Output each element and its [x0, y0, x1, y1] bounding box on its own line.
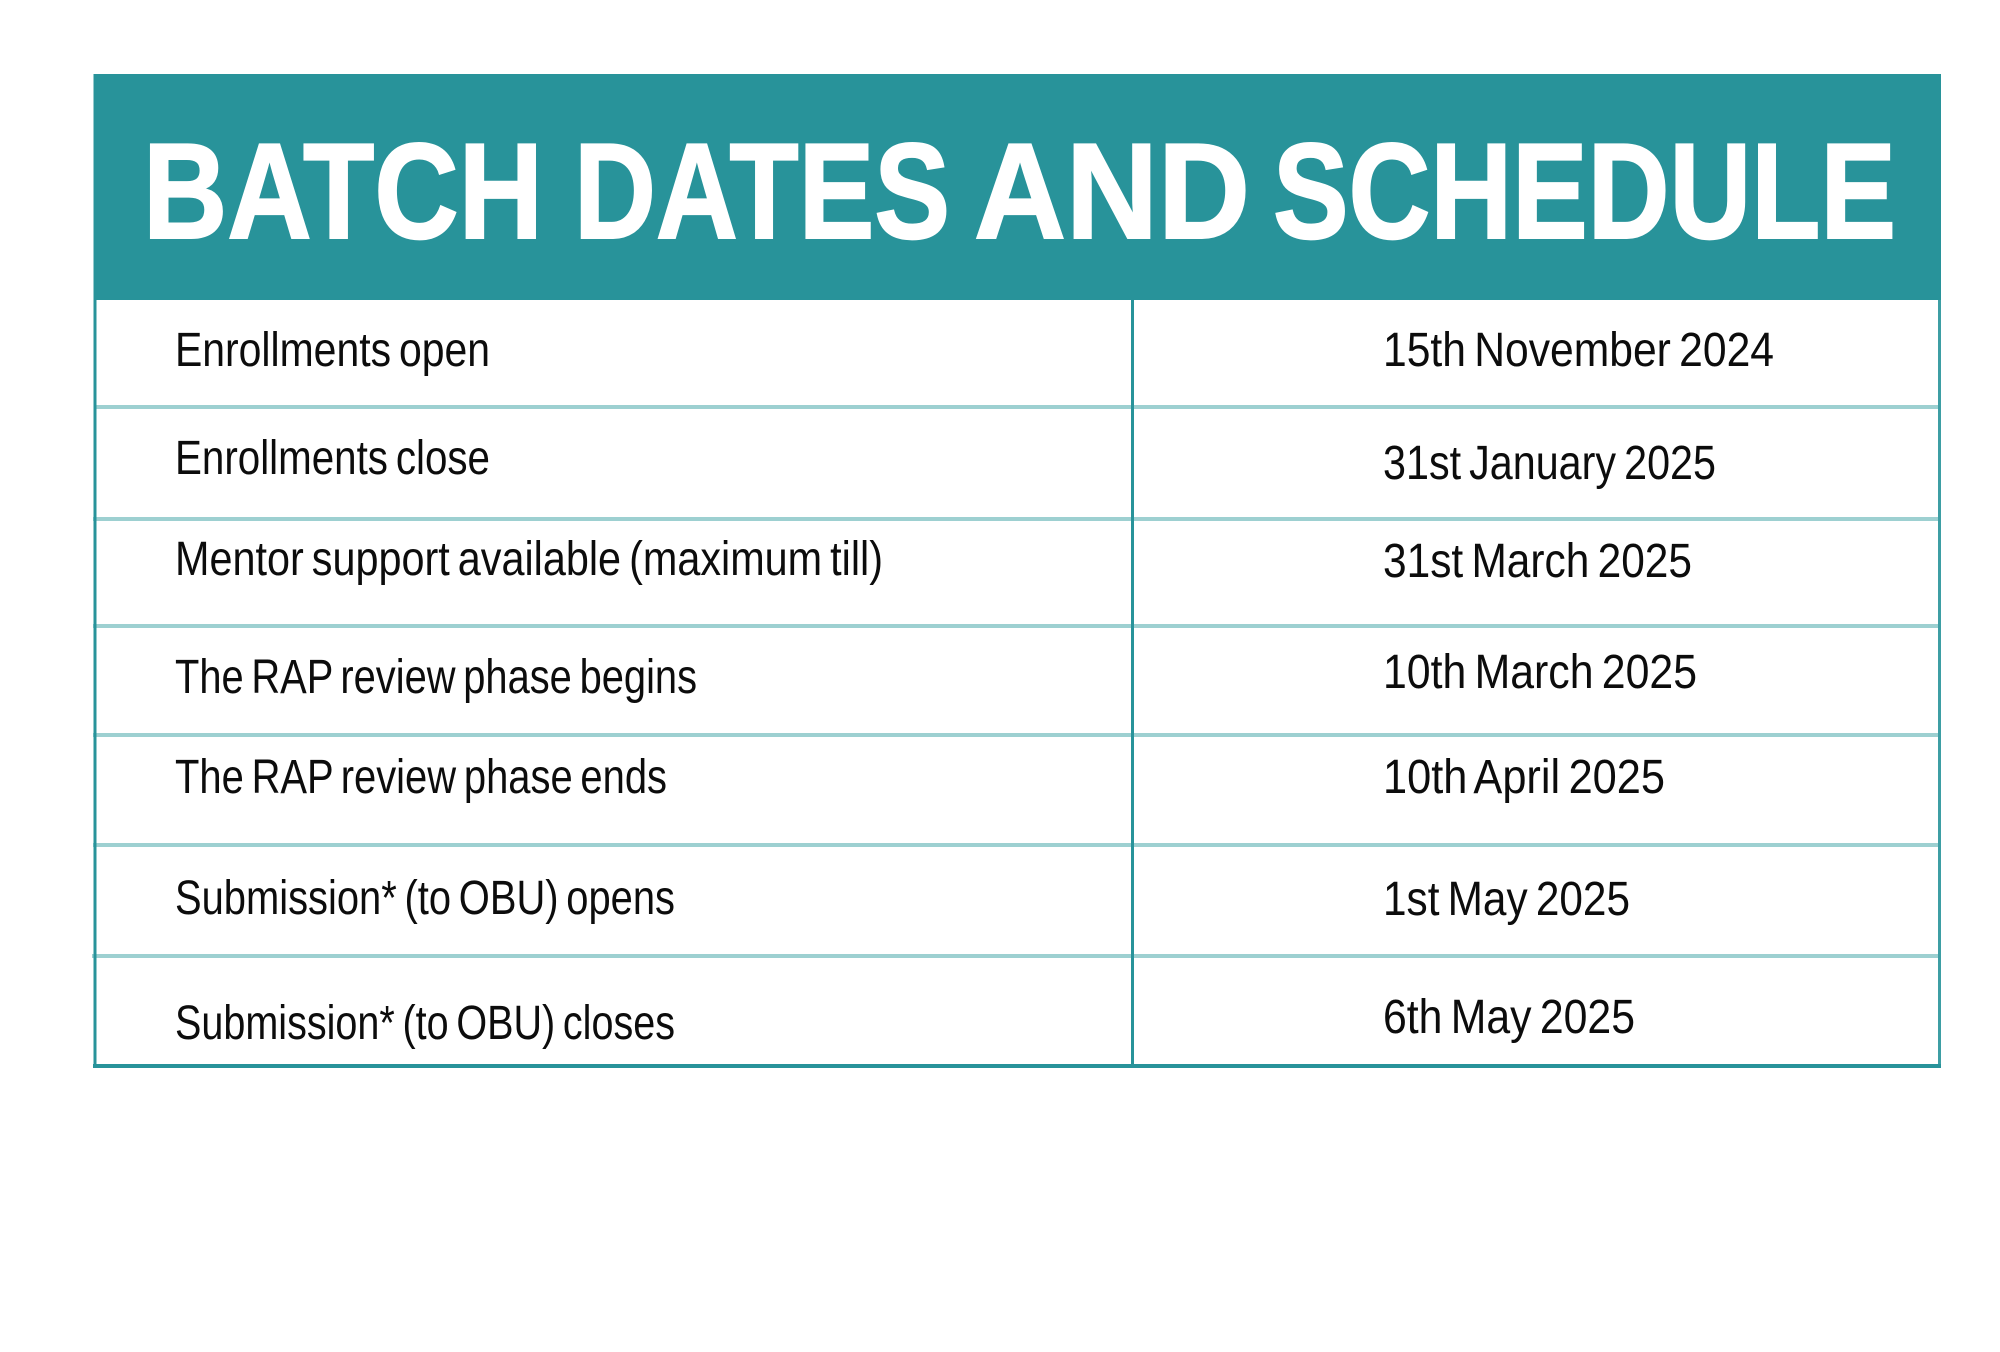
- title: DATES: [574, 115, 950, 267]
- row: enrollments open: 15th November 2024: [1383, 324, 1774, 377]
- row: mentor support: [175, 533, 1692, 588]
- row: submission opens: Submission* (to OBU) opens: [175, 872, 675, 925]
- row: submission closes: 6th May 2025: [1383, 991, 1635, 1044]
- row: enrollments open: [175, 324, 1774, 377]
- title: SCHEDULE: [1273, 115, 1896, 267]
- row: RAP review begins: [175, 646, 1697, 704]
- title: [143, 115, 1896, 267]
- header banner: [94, 74, 1941, 300]
- row: mentor support: Mentor support available (maximum till): [175, 533, 883, 586]
- title: AND: [974, 115, 1250, 267]
- row: RAP review ends: The RAP review phase ends: [175, 751, 667, 804]
- row: submission opens: [175, 872, 1630, 926]
- row: RAP review ends: 10th April 2025: [1383, 751, 1665, 804]
- row: enrollments close: 31st January 2025: [1383, 437, 1716, 490]
- row: mentor support: 31st March 2025: [1383, 535, 1692, 588]
- row: enrollments open: Enrollments open: [175, 324, 490, 377]
- row: RAP review ends: [175, 751, 1665, 804]
- row: RAP review begins: 10th March 2025: [1383, 646, 1697, 699]
- row: submission closes: Submission* (to OBU) closes: [175, 997, 675, 1050]
- table frame and grid: [92, 300, 1941, 1068]
- row: enrollments close: [175, 432, 1716, 490]
- title: BATCH: [143, 115, 543, 267]
- row: submission closes: [175, 991, 1635, 1050]
- row: RAP review begins: The RAP review phase begins: [175, 651, 697, 704]
- row: enrollments close: Enrollments close: [175, 432, 490, 485]
- row: submission opens: 1st May 2025: [1383, 873, 1630, 926]
